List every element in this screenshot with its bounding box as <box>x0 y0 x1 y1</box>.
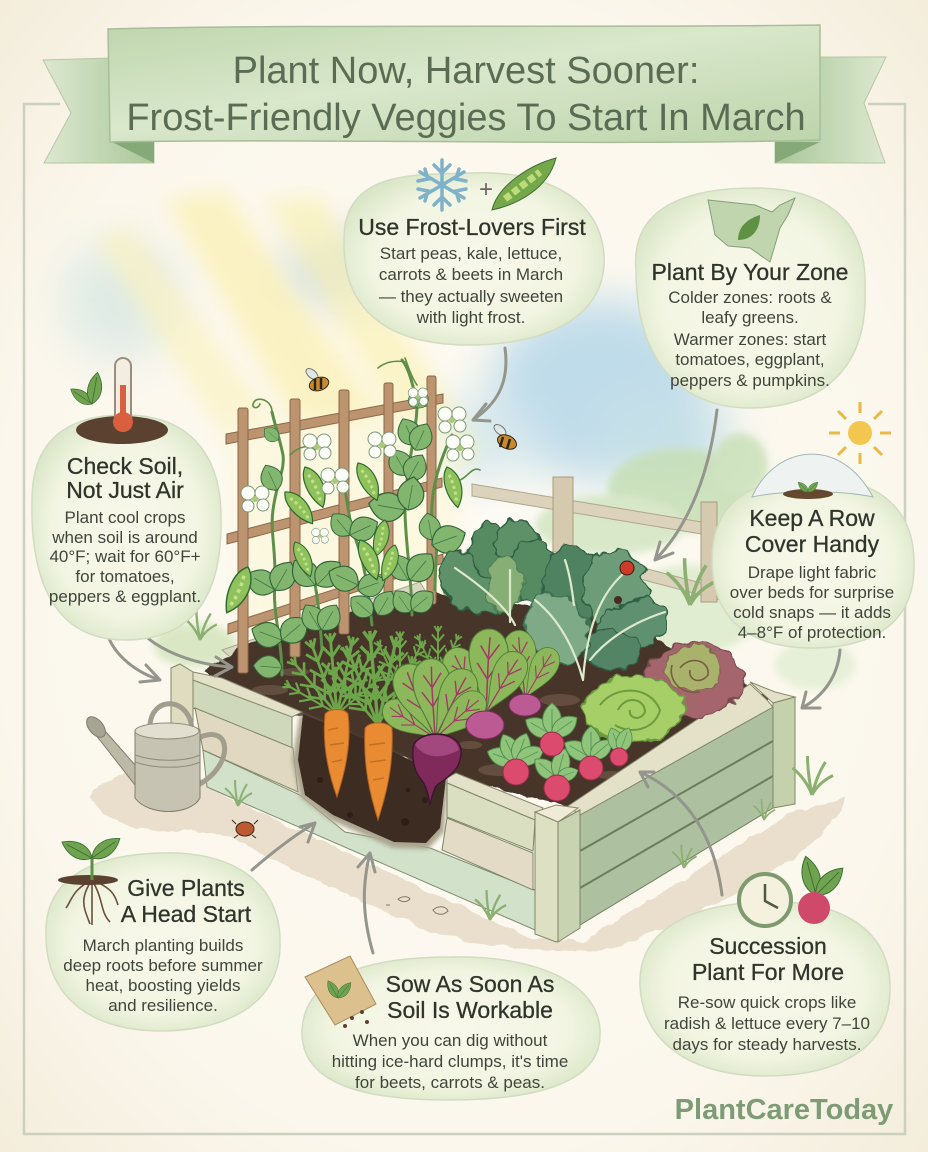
icon: snowflake <box>418 160 466 210</box>
panel: check soil: peppers & eggplant. <box>49 587 201 606</box>
icon: seed packet <box>305 956 376 1028</box>
panel: check soil <box>32 358 221 640</box>
wooden fence <box>472 477 720 602</box>
panel: succession plant for more: Plant For More <box>692 959 844 985</box>
panel: succession plant for more: Re-sow quick crops like <box>678 993 856 1012</box>
icon: clock <box>739 874 791 926</box>
panel: use frost-lovers first <box>344 158 604 345</box>
pea vines <box>219 358 480 679</box>
panel: sow as soon as soil is workable: Soil Is Workable <box>387 997 553 1023</box>
panel: use frost-lovers first: Start peas, kale, lettuce, <box>380 244 562 263</box>
panel: sow as soon as soil is workable <box>302 956 600 1100</box>
panel: give plants a head start: deep roots before summer <box>63 956 263 975</box>
panel: use frost-lovers first: carrots & beets in March <box>379 265 563 284</box>
icon: radish <box>797 854 849 924</box>
panel: check soil: Not Just Air <box>66 477 184 503</box>
radishes <box>484 703 636 801</box>
icon: US map with leaf <box>708 198 795 262</box>
panel: check soil: Check Soil, <box>67 453 183 479</box>
panel: check soil: Plant cool crops <box>65 508 185 527</box>
panel: give plants a head start: A Head Start <box>121 901 252 927</box>
title: Plant Now, Harvest Sooner: <box>233 50 699 92</box>
panel: keep a row cover handy: cold snaps — it adds <box>733 603 891 622</box>
panel: check soil: for tomatoes, <box>75 567 175 586</box>
brand wordmark: PlantCareToday <box>675 1094 893 1126</box>
panel: keep a row cover handy: over beds for surprise <box>730 583 894 602</box>
panel: plant by your zone: peppers & pumpkins. <box>670 371 830 390</box>
title <box>126 50 806 139</box>
panel: plant by your zone: Colder zones: roots & <box>668 288 832 307</box>
panel: plant by your zone <box>636 188 865 408</box>
title ribbon: right <box>775 57 886 163</box>
lettuce <box>583 643 743 742</box>
panel: succession plant for more: days for steady harvests. <box>673 1035 861 1054</box>
title ribbon: left <box>43 58 154 163</box>
panel: give plants a head start: Give Plants <box>127 875 245 901</box>
title: Frost-Friendly Veggies To Start In March <box>126 97 806 139</box>
panel: plant by your zone: leafy greens. <box>701 308 799 327</box>
panel: keep a row cover handy: Drape light fabric <box>748 563 877 582</box>
panel: use frost-lovers first: + <box>479 176 493 203</box>
panel: check soil: when soil is around <box>51 528 198 547</box>
panel: plant by your zone: tomatoes, eggplant, <box>675 350 825 369</box>
panel: plant by your zone: Warmer zones: start <box>674 330 826 349</box>
panel: give plants a head start <box>46 832 280 1031</box>
panel: keep a row cover handy: Cover Handy <box>745 531 880 557</box>
arrows <box>108 348 840 953</box>
panel: sow as soon as soil is workable: When you can dig without <box>353 1031 548 1050</box>
panel: use frost-lovers first: Use Frost-Lovers First <box>358 214 586 240</box>
trellis <box>226 376 443 673</box>
panel: sow as soon as soil is workable: for beets, carrots & peas. <box>355 1073 545 1092</box>
icon: seedling with roots <box>58 832 124 925</box>
beets <box>377 628 566 805</box>
panel: succession plant for more: Succession <box>709 933 827 959</box>
panel: use frost-lovers first: — they actually sweeten <box>379 287 563 306</box>
panel: sow as soon as soil is workable: Sow As Soon As <box>386 971 554 997</box>
title banner <box>108 25 820 142</box>
panel: plant by your zone: Plant By Your Zone <box>652 259 848 285</box>
kale <box>429 520 676 680</box>
icon: pea pod <box>492 158 556 210</box>
panel: succession plant for more <box>640 854 890 1076</box>
watering can <box>83 704 225 812</box>
ground wash <box>88 768 845 951</box>
panel: keep a row cover handy: 4–8°F of protection. <box>738 623 886 642</box>
panel: keep a row cover handy <box>712 402 914 648</box>
sun rays <box>95 190 480 640</box>
panel: keep a row cover handy: Keep A Row <box>749 505 875 531</box>
icon: row cover and sun <box>752 402 891 499</box>
panel: give plants a head start: heat, boosting yields <box>86 976 240 995</box>
panel: use frost-lovers first: with light frost. <box>416 308 525 327</box>
background foliage <box>153 433 855 690</box>
panel: give plants a head start: and resilience. <box>108 996 218 1015</box>
raised garden bed <box>171 582 795 942</box>
grass tufts and soil details <box>184 558 833 920</box>
panel: give plants a head start: March planting builds <box>83 936 243 955</box>
carrots <box>280 626 466 820</box>
sky wash <box>60 235 730 490</box>
bees and ladybug <box>232 366 519 838</box>
panel: sow as soon as soil is workable: hitting ice-hard clumps, it's time <box>332 1052 568 1071</box>
icon: thermometer in soil <box>67 358 168 444</box>
panel: check soil: 40°F; wait for 60°F+ <box>49 547 201 566</box>
panel: succession plant for more: radish & lettuce every 7–10 <box>664 1014 870 1033</box>
